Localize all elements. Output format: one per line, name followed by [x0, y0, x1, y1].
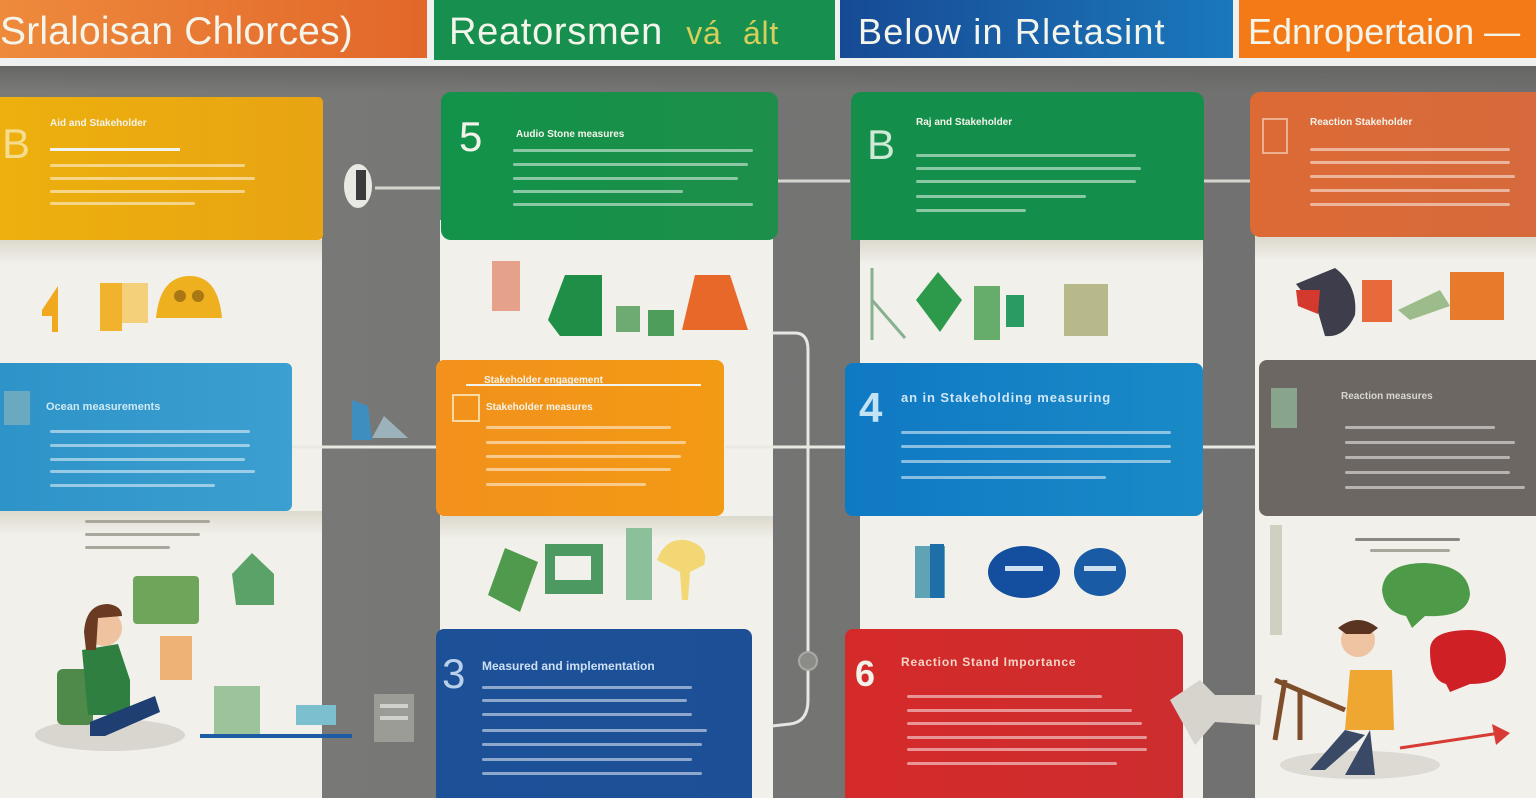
heading: orange: Srlaloisan Chlorces) — [0, 10, 353, 53]
text block: column 1 caption — [85, 520, 210, 549]
top shadow band — [0, 66, 1536, 92]
icon: number 3: 3 — [442, 650, 465, 697]
shadow band: column 1 lower — [0, 511, 322, 535]
card title: Stakeholder engagement — [484, 375, 603, 386]
card title: an in Stakeholding measuring — [901, 390, 1111, 405]
shadow band: column 4 — [1255, 237, 1536, 261]
card title: Measured and implementation — [482, 659, 655, 673]
panel: card 1 yellow — [0, 97, 323, 240]
panel: card 5 blue — [0, 363, 292, 511]
shadow band: column 1 — [0, 240, 322, 264]
shadow band: column 2 lower — [440, 516, 773, 540]
text block: column 4 caption — [1355, 538, 1460, 552]
panel: card 2 green — [441, 92, 778, 240]
panel: card 3 green — [851, 92, 1204, 240]
card title: Raj and Stakeholder — [916, 117, 1012, 128]
panel: card 9 navy — [436, 629, 752, 798]
heading: orange right — [1239, 0, 1536, 58]
top strip — [0, 0, 1536, 66]
heading: orange right: Ednropertaion — — [1248, 11, 1520, 52]
column 2 background — [440, 220, 773, 798]
heading: orange — [0, 0, 427, 58]
icon: number: B — [867, 121, 895, 168]
card title: Reaction Stakeholder — [1310, 117, 1412, 128]
icon: number: 5 — [459, 113, 482, 160]
column 1 background — [0, 220, 322, 798]
card title: Reaction measures — [1341, 391, 1433, 402]
shadow band: column 3 — [860, 240, 1203, 264]
icon: document — [4, 391, 30, 425]
card title: Reaction Stand Importance — [901, 655, 1076, 669]
card title: Ocean measurements — [46, 401, 160, 413]
heading: green: Reatorsmen vá ált — [449, 11, 779, 53]
panel: card 6 orange: Stakeholder measures — [486, 402, 593, 413]
column 3 background — [860, 220, 1203, 798]
icon: number: B — [2, 120, 30, 167]
panel: card 7 blue — [845, 363, 1203, 516]
heading: blue: Below in Rletasint — [858, 11, 1166, 52]
panel: card 6 orange — [436, 360, 724, 516]
card title: Aid and Stakeholder — [50, 118, 147, 129]
icon: box — [1262, 118, 1288, 154]
column 4 background — [1255, 220, 1536, 798]
icon: number 6: 6 — [855, 653, 875, 694]
panel: card 8 dark grey — [1259, 360, 1536, 516]
icon: bin — [1271, 388, 1297, 428]
card title: Audio Stone measures — [516, 129, 624, 140]
icon: number 4: 4 — [859, 384, 882, 431]
panel: card 4 orange-red — [1250, 92, 1536, 237]
panel: card 10 red — [845, 629, 1183, 798]
heading: blue — [840, 0, 1233, 58]
icon: flag — [452, 394, 480, 422]
heading: green — [434, 0, 835, 60]
